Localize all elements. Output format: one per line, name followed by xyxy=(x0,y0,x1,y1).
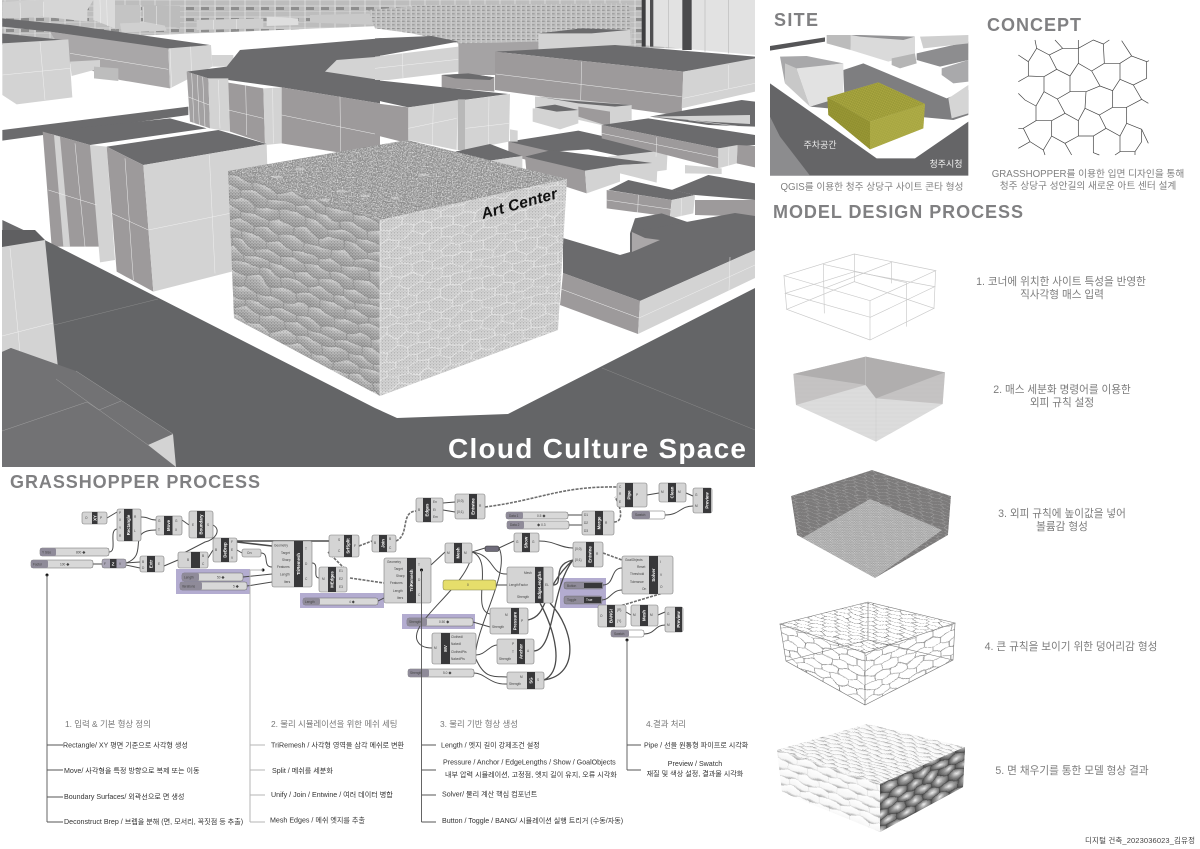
node: MEdges: MEdges xyxy=(330,571,334,588)
node: Join: B xyxy=(389,537,391,541)
slider: Y Size: 800 ◆ xyxy=(76,549,86,554)
node: SG: Strength xyxy=(509,682,521,686)
section 3 text: Pressure / Anchor / EdgeLengths / Show / GoalObjects xyxy=(443,758,616,766)
node: EdgeLengths: Mesh xyxy=(524,571,532,575)
node: Clean: M xyxy=(661,490,664,494)
toggle: Toggle xyxy=(567,598,577,602)
node: Solver: Solver xyxy=(651,568,656,582)
node: Merge: R xyxy=(605,521,608,525)
node: EdgeLengths: LengthFactor xyxy=(509,583,529,587)
caption: step 3: 3. 외피 규칙에 높이값을 넣어 xyxy=(998,508,1126,520)
node: DeBrep xyxy=(213,538,237,562)
node: Rectangle xyxy=(117,509,141,541)
node: Join: B xyxy=(374,541,376,545)
slider: Y Size: Y Size xyxy=(42,550,51,554)
node: Join xyxy=(372,535,396,552)
swatch 1: Swatch xyxy=(635,513,646,517)
diagram: grasshopper node graph xyxy=(31,483,712,689)
caption: concept: 청주 상당구 성안길의 새로운 아트 센터 설계 xyxy=(1000,179,1176,192)
node: Merge: Merge xyxy=(596,516,602,529)
node: Pressure: Strength xyxy=(492,625,504,629)
node: Anchor: A xyxy=(527,649,530,653)
node: TriRemesh: Features xyxy=(277,565,290,569)
node: Pipe: P xyxy=(636,493,638,497)
slider: Iterations: Iterations xyxy=(182,584,196,588)
slider: Data 1: Data 1 xyxy=(509,514,519,518)
node: EdgeLengths: EdgeLengths xyxy=(537,571,542,599)
node: Rectangle: L xyxy=(134,529,136,533)
slider: Data 2 xyxy=(507,521,569,529)
buildings: upper right xyxy=(368,0,755,253)
node: TriRemesh: Iters xyxy=(284,580,291,584)
button: Button xyxy=(567,584,576,588)
node: Mesh 1 xyxy=(445,543,472,563)
node: TriRemesh: Sharp xyxy=(282,558,291,562)
node: Anchor: P xyxy=(512,642,514,646)
node: SG: M xyxy=(520,675,523,679)
caption: concept xyxy=(992,167,1184,192)
node: TriRemesh 2: TriRemesh xyxy=(409,569,414,591)
node: Crv: Crv xyxy=(247,551,252,555)
swatch 1 xyxy=(632,511,665,519)
node: TriRemesh 2: Target xyxy=(394,567,403,571)
node: Entwine 2: Entwine xyxy=(588,546,592,563)
slider: Data 1: 0.5 ◆ xyxy=(537,513,546,518)
node: Z: F xyxy=(104,562,106,566)
node: Pipe xyxy=(617,483,647,507)
leader 3 xyxy=(420,568,436,822)
caption: step 1: 직사각형 매스 입력 xyxy=(1020,288,1104,301)
node: Solver: V xyxy=(660,573,663,577)
node: Move: G xyxy=(175,519,178,523)
node: Pipe: Pipe xyxy=(626,490,632,500)
node: TriRemesh xyxy=(272,541,312,587)
section 1 text: Boundary Surfaces/ 외곽선으로 면 생성 xyxy=(64,792,184,801)
node: Merge: D2 xyxy=(584,521,588,525)
section 3 text: Button / Toggle / BANG/ 시뮬레이션 실행 트리거 (수동/자동) xyxy=(442,816,623,825)
section 4 text: Pipe / 선을 원통형 파이프로 시각화 xyxy=(644,740,749,750)
node: MV: MV xyxy=(443,645,448,652)
node: DeBrep: B xyxy=(215,548,217,552)
node: Merge: D1 xyxy=(584,513,588,517)
node: TriRemesh: TriRemesh xyxy=(296,553,301,575)
node: Solver: Threshold xyxy=(630,572,644,576)
caption: step 3 xyxy=(998,508,1126,533)
node: Pipe: C xyxy=(619,485,622,489)
node: SG: SG xyxy=(528,677,534,684)
node: Show: Show xyxy=(524,536,528,548)
node: XY xyxy=(82,512,107,524)
node: Edges: B xyxy=(418,508,420,512)
node: TriRemesh: Target xyxy=(281,551,290,555)
section 1 text: Move/ 사각형을 특정 방향으로 복제 또는 이동 xyxy=(64,766,200,775)
node: EdgeLengths xyxy=(507,567,553,603)
node: DeBrep: F xyxy=(231,540,233,544)
node: Pipe: R xyxy=(619,492,622,496)
slider: Iterations: 5 ◆ xyxy=(233,583,240,588)
node: Solver: GoalObjects xyxy=(625,558,643,562)
caption: step 2 xyxy=(993,384,1131,409)
node: BANG: {R} xyxy=(617,608,621,612)
node: Brep param: B xyxy=(202,554,204,558)
node: TriRemesh 2: D xyxy=(418,578,421,582)
section 4 text: Preview / Swatch xyxy=(668,760,722,768)
right lower building xyxy=(54,213,755,430)
buildings: upper left xyxy=(2,18,380,292)
node: Entwine 1: {0;0} xyxy=(457,499,464,503)
node: Extr xyxy=(140,556,164,572)
section 3 text: 내부 압력 시뮬레이션, 고정점, 엣지 길이 유지, 오류 시각화 xyxy=(445,770,617,779)
node: Entwine 2: R xyxy=(596,552,599,556)
diagram: concept voronoi xyxy=(1018,40,1149,155)
toggle: True xyxy=(586,598,593,602)
caption: step 2: 2. 매스 세분화 명령어를 이용한 xyxy=(993,384,1131,396)
section 4 text: 4.결과 처리 xyxy=(646,719,686,729)
node: XY: P xyxy=(100,516,102,520)
slider: Length: 50 ◆ xyxy=(217,574,225,579)
node: MV xyxy=(432,633,476,664)
relay xyxy=(485,546,499,552)
node: Crv xyxy=(242,549,261,557)
node: Edges: Em xyxy=(433,515,438,519)
caption: step 1 xyxy=(976,275,1146,301)
slider: Strength: Strength xyxy=(409,620,421,624)
node: Mesh 1: M xyxy=(447,551,450,555)
node: Preview 1: G xyxy=(695,493,698,497)
node: Mesh 2: Mesh xyxy=(642,610,646,621)
node: Brep param xyxy=(178,552,208,568)
node: Show: G xyxy=(532,540,535,544)
slider: Factor xyxy=(31,560,93,568)
slider: Strength 2: Strength xyxy=(410,671,422,675)
node: Preview 1 xyxy=(693,488,712,513)
label: Art Center: Art Center xyxy=(479,185,560,223)
node: TriRemesh: Length xyxy=(280,572,290,576)
node: Move: X xyxy=(175,528,178,532)
section 3 text xyxy=(440,719,623,825)
node: MV: M xyxy=(434,646,437,650)
node: Mesh 2: M xyxy=(650,613,653,617)
heading: concept: CONCEPT xyxy=(987,15,1081,35)
node: TriRemesh 2 xyxy=(384,558,431,603)
highlight panels xyxy=(176,569,606,629)
node: Show: G xyxy=(516,540,519,544)
node: Boundary: Boundary xyxy=(198,514,204,535)
node: Mesh 1: M xyxy=(464,551,467,555)
node: Solver: On xyxy=(642,587,646,591)
node: Solver: Tolerance xyxy=(630,580,644,584)
heading: model design process: MODEL DESIGN PROCESS xyxy=(773,202,1023,222)
panel value: yellow: 0 xyxy=(467,583,469,587)
node: Pipe: E xyxy=(619,500,621,504)
node: Z: V xyxy=(119,562,122,566)
node: Extr: D xyxy=(142,566,145,570)
section 2 text: Mesh Edges / 메쉬 엣지를 추출 xyxy=(270,816,365,824)
section 4 text xyxy=(644,719,749,778)
node: Solver xyxy=(622,556,673,594)
node: TriRemesh 2: T xyxy=(418,563,420,567)
node: TriRemesh 2: Sharp xyxy=(396,574,405,578)
swatch 2: Swatch xyxy=(614,632,625,636)
node: Preview 1: Preview xyxy=(704,492,710,509)
node: Brep param: B xyxy=(187,558,189,562)
node: MEdges: E1 xyxy=(339,569,343,573)
node: DeBrep: DeBrep xyxy=(222,542,228,558)
node: Rectangle: P xyxy=(119,511,121,515)
node: Entwine 2 xyxy=(573,542,603,567)
slider: Iterations xyxy=(180,582,247,590)
node: Boundary: S xyxy=(207,523,209,527)
node: Mesh 1: Mesh xyxy=(456,547,460,558)
node: TriRemesh: D xyxy=(305,562,308,566)
section 2 text: Unify / Join / Entwine / 여러 데이터 병합 xyxy=(271,790,393,799)
caption: concept: GRASSHOPPER를 이용한 입면 디자인을 통해 xyxy=(992,167,1184,180)
node: Mesh 2: M xyxy=(633,613,636,617)
node: Clean: Clean xyxy=(670,486,674,498)
caption: step 2: 외피 규칙 설정 xyxy=(1030,397,1094,409)
node: Merge xyxy=(582,511,614,535)
section 1 text: Rectangle/ XY 평면 기준으로 사각형 생성 xyxy=(63,740,188,750)
caption: step 5: 5. 면 채우기를 통한 모델 형상 결과 xyxy=(995,765,1149,777)
node: Anchor: Anchor xyxy=(518,644,524,659)
node: TriRemesh 2: Features xyxy=(390,581,403,585)
node: EdgeLengths: EL xyxy=(545,583,549,587)
node: Rectangle: Rectangle xyxy=(126,514,131,535)
buildings: far left blocks xyxy=(2,0,380,33)
node: MV: ClothedPts xyxy=(451,650,467,654)
node: BANG: {Y} xyxy=(617,619,621,623)
node: Boundary: E xyxy=(192,523,194,527)
node: Entwine 2: {0;1} xyxy=(575,558,582,562)
slider: Length: Length xyxy=(184,575,194,579)
section 2 text: 2. 물리 시뮬레이션을 위한 메쉬 세팅 xyxy=(271,719,398,729)
model step 2: fine mesh box xyxy=(793,357,945,442)
button xyxy=(564,582,603,589)
node: EdgeLengths: Strength xyxy=(517,595,529,599)
wires xyxy=(93,487,693,684)
node: Brep param: C xyxy=(202,562,205,566)
heading: site: SITE xyxy=(774,10,818,30)
node: Preview 2 xyxy=(665,607,683,632)
section 1 text xyxy=(63,719,243,826)
node: Preview 2: G xyxy=(667,612,670,616)
node: Z: Z xyxy=(112,562,115,566)
node: Clean: M xyxy=(678,490,681,494)
credit: 디지털 건축_2023036023_김유정 xyxy=(1085,835,1195,845)
section 3 text: Length / 엣지 길이 강제조건 설정 xyxy=(441,740,540,750)
model step 3: mesh with volume xyxy=(791,470,951,578)
node: Boundary xyxy=(189,511,213,538)
node: TriRemesh 2: Length xyxy=(393,589,403,593)
model step 4: wire cells box xyxy=(779,602,956,706)
node: SG: S xyxy=(537,678,539,682)
section 3 text: 3. 물리 기반 형상 생성 xyxy=(440,719,518,729)
node: DeBrep: V xyxy=(231,556,234,560)
node: TriRemesh 2: C xyxy=(418,593,421,597)
node: Split xyxy=(329,535,359,557)
node: Extr: Extr xyxy=(148,559,154,568)
caption: site: QGIS를 이용한 청주 상당구 사이트 콘타 형성 xyxy=(781,181,963,193)
node: Rectangle: X xyxy=(119,518,122,522)
section 2 text xyxy=(270,719,405,824)
left foreground buildings xyxy=(2,230,177,467)
node: Z xyxy=(102,559,126,568)
node: SG xyxy=(507,672,544,689)
node: Preview 2: M xyxy=(667,623,670,627)
title: Cloud Culture Space xyxy=(448,433,746,464)
node: Edges xyxy=(416,498,443,522)
node: Pressure: P xyxy=(521,619,523,623)
slider: Length 2: Length xyxy=(305,600,315,604)
panel: site model xyxy=(770,35,969,176)
node: Mesh 2 xyxy=(631,605,658,626)
slider: Strength 2: 5.0 ◆ xyxy=(443,670,452,675)
node: XY: XY xyxy=(92,515,97,521)
node: Rectangle: R xyxy=(119,534,122,538)
node: MEdges: E3 xyxy=(339,585,343,589)
node: Show xyxy=(514,533,539,552)
node: Edges: Ei xyxy=(433,508,436,512)
leader 1 xyxy=(46,574,63,822)
node: TriRemesh 2: Geometry xyxy=(387,560,401,564)
panel: main city render xyxy=(2,0,755,467)
node: Move: T xyxy=(158,528,160,532)
node: Split: SrfSplit xyxy=(346,538,350,554)
slider: Y Size xyxy=(40,548,109,556)
node: Preview 1: M xyxy=(695,504,698,508)
node: BANG xyxy=(598,605,626,627)
node: BANG: BANG! xyxy=(608,608,614,623)
node: Entwine 1 xyxy=(455,494,485,519)
heading: grasshopper process: GRASSHOPPER PROCESS xyxy=(10,472,260,492)
model step 1: wire box xyxy=(784,254,936,340)
slider: Data 2: Data 2 xyxy=(510,523,520,527)
slider: Factor: 100 ◆ xyxy=(60,561,70,566)
slider: Data 1 xyxy=(506,512,568,519)
node: MEdges xyxy=(319,567,347,592)
node: BANG: O xyxy=(600,614,603,618)
slider: Data 2: ◆ 0.3 xyxy=(537,522,546,527)
node: Entwine 1: R xyxy=(479,504,482,508)
slider: Length 2: 4 ◆ xyxy=(349,599,356,604)
road surface xyxy=(2,230,755,467)
node: MEdges: M xyxy=(322,577,325,581)
node: TriRemesh: C xyxy=(305,577,308,581)
section 1 text: Deconstruct Brep / 브렙을 분해 (면, 모서리, 꼭짓점 등 추출) xyxy=(64,817,243,826)
caption: step 3: 볼륨감 형성 xyxy=(1036,521,1088,533)
slider: Strength 2 xyxy=(408,669,474,677)
node: Solver: I xyxy=(660,560,661,564)
slider: Length 2 xyxy=(303,598,378,605)
node: Split: C xyxy=(338,549,341,553)
node: MV: NakedPts xyxy=(451,657,465,661)
Art Center cube xyxy=(228,140,567,396)
slider: Factor: Factor xyxy=(33,562,43,566)
node: Join: Join xyxy=(380,539,386,548)
toggle xyxy=(564,596,602,604)
node: Rectangle: Y xyxy=(119,526,122,530)
panel value: yellow xyxy=(443,580,496,590)
model step 5: final shaded model xyxy=(777,724,965,832)
section 2 text: Split / 메쉬를 세분화 xyxy=(272,766,333,775)
node: Move: G xyxy=(158,519,161,523)
node: Extr: B xyxy=(142,560,144,564)
slider: Strength: 0.50 ◆ xyxy=(439,619,450,624)
node: Pressure: M xyxy=(505,613,508,617)
section 1 text: 1. 입력 & 기본 형상 정의 xyxy=(65,719,151,729)
node: Anchor: T xyxy=(512,650,514,654)
leader 4 xyxy=(626,638,641,770)
section 2 text: TriRemesh / 사각형 영역을 삼각 메쉬로 변환 xyxy=(271,740,405,750)
node: Anchor: Strength xyxy=(499,657,511,661)
leader 2 xyxy=(250,568,265,822)
node: Move xyxy=(156,516,182,535)
node: DeBrep: E xyxy=(231,548,233,552)
caption: step 4: 4. 큰 규칙을 보이기 위한 덩어리감 형성 xyxy=(985,640,1157,653)
node: Clean xyxy=(659,483,686,502)
slider: Strength xyxy=(407,618,473,626)
node: Entwine 1: Entwine xyxy=(470,498,476,515)
node: Entwine 2: {0;0} xyxy=(575,547,582,551)
node: TriRemesh 2: Iters xyxy=(397,596,404,600)
node: MV: NakedI xyxy=(451,642,461,646)
node: Solver: O xyxy=(660,585,663,589)
section 3 text: Solver/ 물리 계산 핵심 컴포넌트 xyxy=(442,790,538,798)
node: Pressure: Pressure xyxy=(512,611,518,630)
node: Solver: Reset xyxy=(637,565,645,569)
caption: step 1: 1. 코너에 위치한 사이트 특성을 반영한 xyxy=(976,275,1146,288)
node: MV: ClothedI xyxy=(451,635,463,639)
node: Extr: E xyxy=(158,562,160,566)
node: Edges: Edges xyxy=(424,503,430,516)
node: Split: F xyxy=(354,544,356,548)
section 4 text: 재질 및 색상 설정, 결과물 시각화 xyxy=(647,769,744,778)
slider: Length xyxy=(182,573,243,581)
far city blocks xyxy=(2,0,680,48)
node: Pressure xyxy=(490,608,528,634)
node: Edges: En xyxy=(433,500,437,504)
node: Join: C xyxy=(389,546,392,550)
node: Entwine 1: {0;1} xyxy=(457,510,464,514)
swatch 2 xyxy=(611,630,644,637)
node: Split: S xyxy=(338,538,340,542)
node: Preview 2: Preview xyxy=(676,611,681,628)
node: MEdges: E2 xyxy=(339,577,343,581)
label: city hall: 청주시청 xyxy=(929,159,963,169)
node: Move: Move xyxy=(166,519,171,531)
label: parking: 주차공간 xyxy=(803,139,837,150)
node: Rectangle: R xyxy=(134,515,137,519)
node: TriRemesh: Geometry xyxy=(274,544,288,548)
node: Merge: D3 xyxy=(584,529,588,533)
node: Anchor xyxy=(497,639,534,664)
node: XY: O xyxy=(85,516,88,520)
node: TriRemesh: T xyxy=(305,547,307,551)
